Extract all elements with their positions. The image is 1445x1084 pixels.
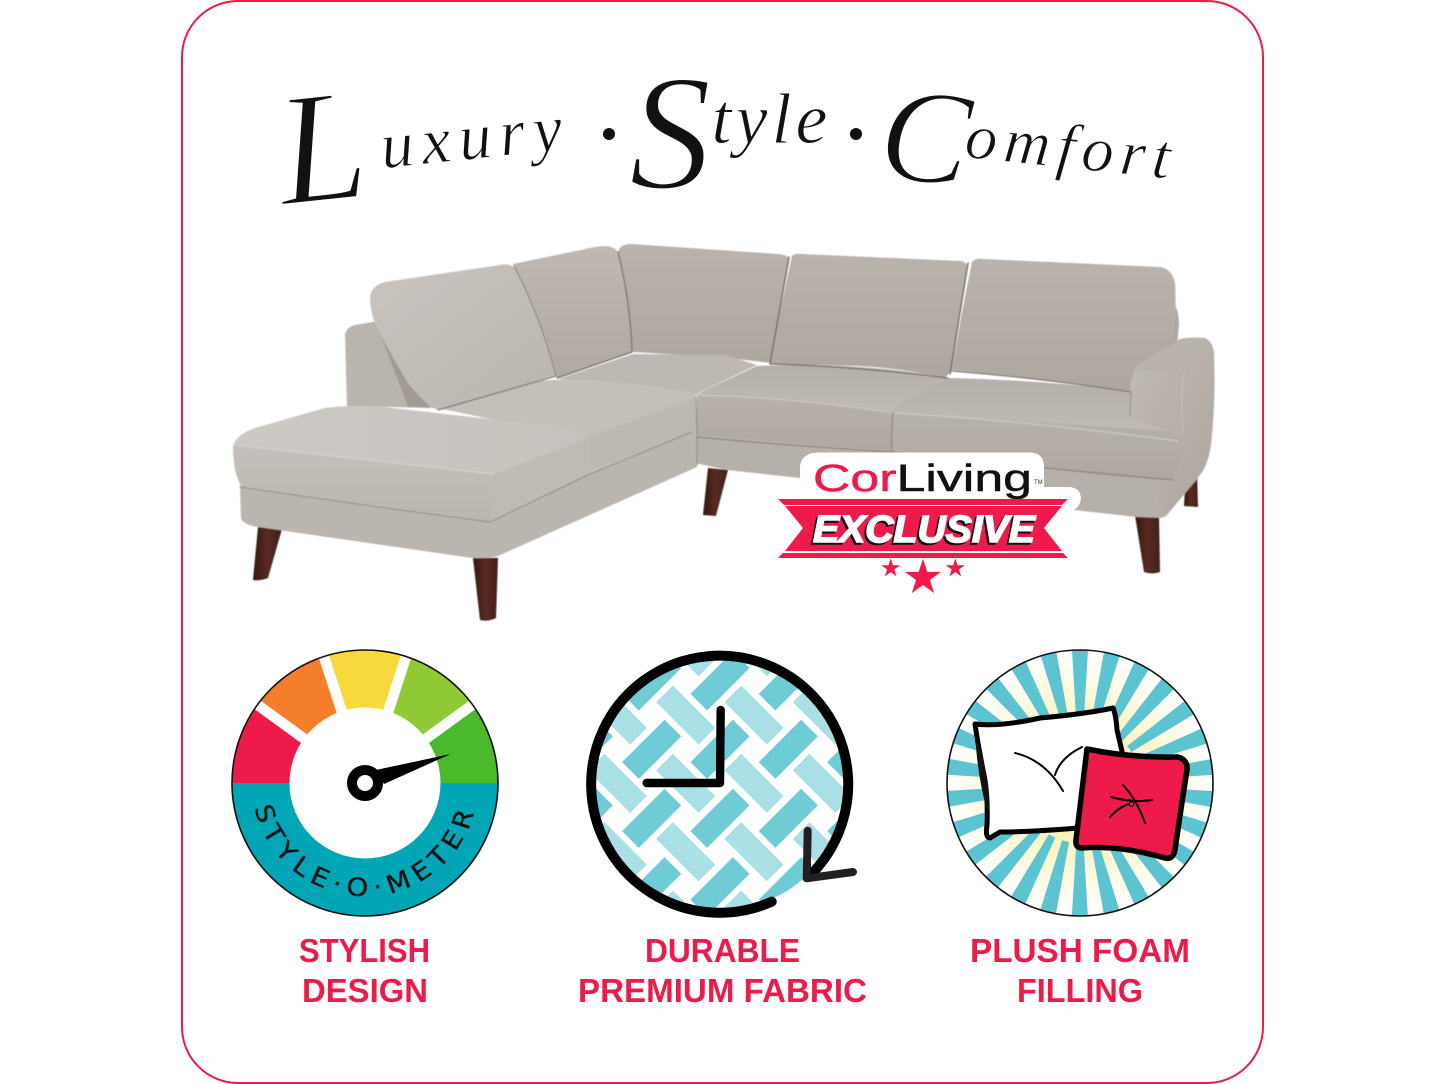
arm top [1135,338,1205,373]
right arm [1130,338,1215,516]
gauge light green segment [365,656,473,783]
fabric pattern [596,660,844,908]
label: stylish design: STYLISH [299,932,430,969]
white pillow [975,708,1124,838]
exclusive text: EXCLUSIVE [813,509,1037,551]
icon: woven fabric clock [586,650,857,918]
trademark: TM [1034,480,1043,486]
exclusive shadow: EXCLUSIVE [811,511,1035,553]
corner seat [558,354,757,395]
red cushion [1076,749,1187,858]
sofa left section base [240,426,697,558]
left star [881,558,900,576]
label: plush foam filling: FILLING [1017,972,1143,1009]
sofa seam lines [234,252,1184,522]
title separator dot [850,128,862,140]
fabric background [593,656,847,910]
left arm inner shade [376,322,430,408]
label: plush foam filling: PLUSH FOAM [970,932,1190,969]
title separator dot [603,128,615,140]
cushion tuft [1110,785,1152,823]
clock arrowhead [807,831,853,878]
centre star [905,559,941,593]
pillow creases [1015,747,1082,791]
page frame [182,1,1263,1083]
gauge separators [257,656,473,783]
back cushion D [770,254,967,378]
gauge label: STYLE·O·METER [255,805,474,896]
badge white backing [780,452,1081,522]
fabric dark bands [596,660,844,908]
label: durable premium fabric: PREMIUM FABRIC [578,972,867,1009]
chaise side [490,438,589,521]
seat left middle [442,380,697,474]
gauge yellow segment [324,650,406,783]
CorLiving Exclusive badge [778,452,1081,593]
title word: Comfort: omfort [962,100,1181,193]
infographic [181,0,1264,1084]
chaise cushion [233,406,589,521]
ribbon body [785,506,1062,551]
feature labels [299,932,1190,1009]
sofa back lip [1128,300,1179,392]
chaise top [234,406,587,475]
sofa [233,244,1215,621]
sunburst glow core [1020,723,1140,843]
title word: Comfort: C [873,59,978,216]
seat front left middle [585,398,697,472]
gauge hub [352,770,378,796]
gauge needle [376,754,451,784]
label: durable premium fabric: DURABLE [645,932,800,969]
title [266,32,1185,240]
sunburst outline [947,650,1213,916]
title word: Style: tyle [712,79,831,159]
stars [881,558,965,593]
title word: Luxury: L [268,53,375,240]
cushion button [1130,802,1134,806]
clock ring [591,656,848,913]
sunburst background [947,650,1213,916]
gauge green segment [365,705,498,783]
sunburst rays [1010,713,1150,853]
seat right [892,378,1182,480]
label: durable premium fabric [578,932,867,1009]
title word: Style: S [629,41,712,224]
gauge outline [232,650,498,916]
title word: Luxury: uxury [377,91,574,183]
brand name: Cor Living [813,458,1032,500]
seat right top [894,378,1170,431]
sofa legs [253,468,1198,621]
back cushion B [513,246,633,378]
icon: pillows on sunburst [947,650,1213,916]
label: stylish design: DESIGN [302,972,428,1009]
gauge centre [290,708,440,858]
ribbon bottom strip [778,553,1068,558]
fabric light bands [596,660,844,908]
pillow seam [977,743,988,810]
ribbon top strip [778,499,1068,505]
icon: style-o-meter gauge [231,649,499,917]
gauge lower band [232,783,498,916]
back cushion E [952,259,1176,392]
gauge red segment [232,705,365,783]
label: plush foam filling [970,932,1190,1009]
sofa right section base [695,425,1198,518]
back cushion C [618,244,789,363]
clock hands [647,710,721,783]
gauge orange segment [257,656,365,783]
sofa left arm [345,321,440,408]
back cushion A [370,264,556,410]
right star [946,558,965,576]
label: stylish design [299,932,430,1009]
seat center [697,365,948,451]
seat center top [700,365,948,412]
